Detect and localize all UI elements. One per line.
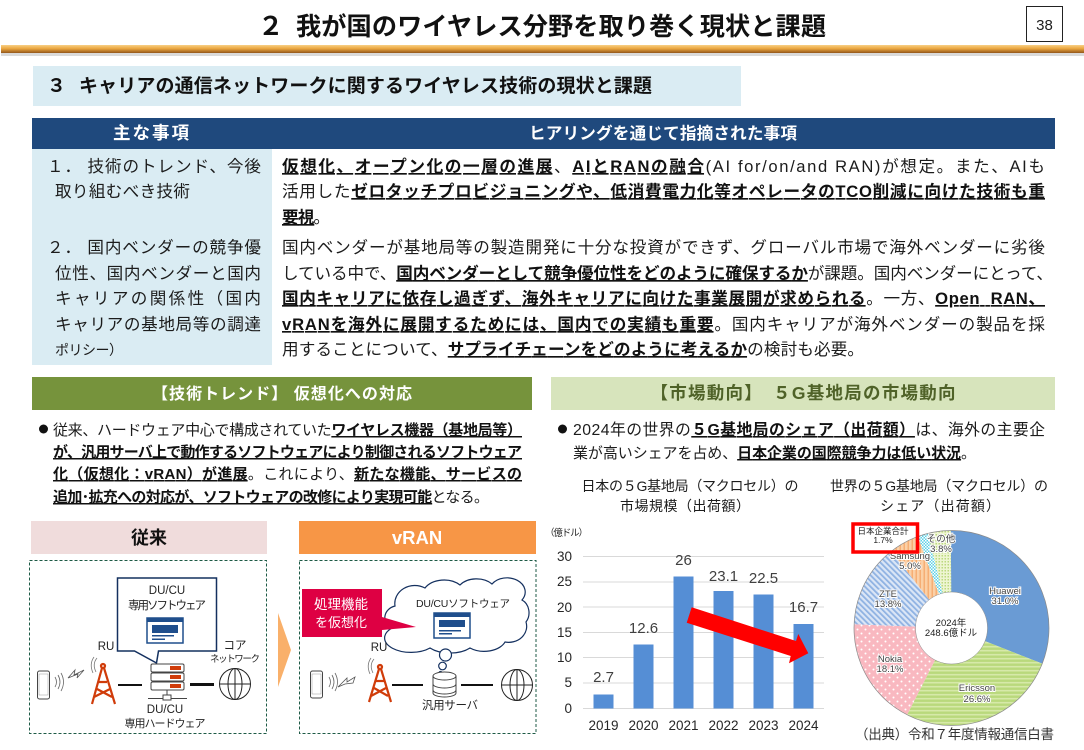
icon: smartphone — [38, 670, 84, 699]
cloud: DU/CU software — [385, 578, 529, 674]
left column: topics — [32, 149, 272, 365]
axis unit: （億ドル） — [545, 527, 588, 539]
market heading — [551, 377, 1055, 410]
conventional heading — [31, 521, 267, 554]
finding 2 text: している中で、国内ベンダーとして競争優位性をどのように確保するかが課題。国内ベンダーにとって、 — [282, 263, 1053, 283]
x axis labels: 2022 — [708, 718, 739, 733]
panel: market trend — [545, 377, 1055, 742]
trend bullet text: が、汎用サーバ上で動作するソフトウェアにより制御されるソフトウェア — [53, 443, 522, 461]
conventional heading: 従来 — [131, 528, 167, 548]
market bullet text: 2024年の世界の５G基地局のシェア（出荷額）は、海外の主要企 — [573, 421, 1045, 439]
left column: topics: 位性、国内ベンダーと国内 — [55, 264, 261, 283]
trend bullet text: 従来、ハードウェア中心で構成されていたワイヤレス機器（基地局等） — [53, 421, 522, 439]
icon: general-purpose server — [433, 672, 456, 697]
donut center total: 248.6億ドル — [925, 627, 978, 639]
label: dedicated hardware: DU/CU — [147, 704, 183, 716]
y axis labels: 15 — [557, 625, 572, 640]
left column: topics: １． 技術のトレンド、今後 — [47, 157, 261, 176]
donut slice labels: Samsung — [890, 551, 930, 562]
label: RU: RU — [98, 641, 114, 653]
bar values: 23.1 — [709, 568, 738, 585]
finding 1 text — [282, 157, 1045, 227]
cloud: DU/CU software: DU/CUソフトウェア — [416, 598, 510, 610]
finding 1 text: 活用したゼロタッチプロビジョニングや、低消費電力化等オペレータのTCO削減に向けた技術も重 — [282, 181, 1045, 201]
y axis labels: 25 — [557, 574, 572, 589]
callout: dedicated software — [118, 578, 216, 663]
donut slice labels: その他 — [927, 533, 956, 545]
bar values: 26 — [675, 552, 692, 569]
trend bullet text: 化（仮想化：vRAN）が進展。これにより、新たな機能、サービスの — [53, 465, 522, 483]
chart caption: Japan market size: 市場規模（出荷額） — [620, 498, 750, 514]
x axis labels: 2021 — [668, 718, 699, 733]
label: general-purpose server: 汎用サーバ — [422, 698, 478, 712]
donut center total — [925, 617, 978, 639]
x axis labels — [588, 718, 819, 733]
page number — [1026, 6, 1062, 42]
vRAN heading — [299, 521, 536, 554]
bars — [594, 576, 814, 708]
label: core network — [210, 640, 260, 665]
icon: globe — [502, 670, 532, 700]
label: core network: ネットワーク — [210, 654, 260, 665]
source note: （出典）令和７年度情報通信白書 — [855, 727, 1054, 742]
market bullet text — [558, 421, 1045, 462]
donut slice labels — [875, 533, 1021, 705]
left column: topics: キャリアの基地局等の調達 — [55, 315, 261, 334]
section heading — [33, 66, 741, 106]
market bullet text: 業が高いシェアを占め、日本企業の国際競争力は低い状況。 — [573, 444, 976, 462]
chart caption: world share — [830, 478, 1048, 514]
y axis labels — [557, 549, 572, 716]
left column: topics: キャリアの関係性（国内 — [55, 289, 261, 308]
link lines — [392, 684, 493, 686]
chart caption: world share: シェア（出荷額） — [880, 498, 1000, 514]
callout: virtualize processing: 処理機能 — [314, 597, 368, 612]
donut slice labels: Nokia — [878, 654, 903, 665]
label: core network: コア — [224, 640, 246, 652]
diagram: conventional architecture — [30, 560, 266, 734]
title rule — [1, 45, 1084, 56]
donut slice labels: Huawei — [989, 586, 1021, 597]
finding 2 text: 国内キャリアに依存し過ぎず、海外キャリアに向けた事業展開が求められる。一方、Open RAN、 — [282, 288, 1045, 308]
grid lines and axis — [583, 556, 824, 708]
chart caption: Japan market size: 日本の５G基地局（マクロセル）の — [582, 478, 798, 494]
chart caption: Japan market size — [582, 478, 798, 514]
y axis labels: 30 — [557, 549, 572, 564]
callout: virtualize processing — [302, 589, 416, 637]
table header: ヒアリングを通じて指摘された事項 — [529, 123, 797, 143]
bar values: 22.5 — [749, 570, 778, 587]
trend bullet text: 追加･拡充への対応が、ソフトウェアの改修により実現可能となる。 — [53, 488, 489, 506]
bar values: 2.7 — [593, 669, 614, 686]
donut slice labels: Ericsson — [959, 683, 995, 694]
arrow: declining trend — [687, 607, 808, 663]
page number: 38 — [1036, 17, 1053, 34]
icon: antenna tower — [368, 658, 391, 702]
y axis labels: 0 — [564, 701, 572, 716]
finding 2 text: 用することについて、サプライチェーンをどのように考えるかの検討も必要。 — [282, 340, 864, 359]
callout: Japanese companies total: 日本企業合計 — [857, 526, 909, 536]
x axis labels: 2023 — [748, 718, 779, 733]
y axis labels: 20 — [557, 600, 572, 615]
diagram: vRAN architecture — [300, 560, 536, 734]
finding 2 text — [282, 238, 1053, 359]
callout: dedicated software: 専用ソフトウェア — [128, 599, 206, 612]
bar values — [593, 552, 818, 686]
y axis labels: 5 — [564, 675, 572, 690]
donut slice labels: 5.0% — [899, 561, 921, 572]
title: ２ — [258, 13, 284, 41]
panel: technology trend — [30, 377, 536, 734]
table header — [32, 118, 1055, 149]
x axis labels: 2024 — [788, 718, 819, 733]
label: RU: RU — [371, 642, 387, 654]
finding 1 text: 仮想化、オープン化の一層の進展、AIとRANの融合(AI for/on/and RAN)が想定。また、AIも — [282, 157, 1045, 176]
section heading: ３ — [47, 76, 66, 97]
left column: topics: ２． 国内ベンダーの競争優 — [47, 238, 261, 257]
x axis labels: 2020 — [628, 718, 659, 733]
donut chart: world share — [853, 524, 1049, 726]
callout: virtualize processing: を仮想化 — [315, 615, 367, 630]
donut slice labels: 26.6% — [964, 694, 991, 705]
finding 2 text: vRANを海外に展開するためには、国内での実績も重要。国内キャリアが海外ベンダーの製品を採 — [282, 315, 1045, 334]
chart caption: world share: 世界の５G基地局（マクロセル）の — [830, 478, 1048, 494]
panel: findings table — [32, 118, 1055, 365]
market heading: 【市場動向】 ５G基地局の市場動向 — [650, 383, 956, 403]
table header: 主な事項 — [113, 123, 190, 143]
bar values: 16.7 — [789, 599, 818, 616]
bar values: 12.6 — [629, 620, 658, 637]
donut slice labels: 18.1% — [877, 664, 904, 675]
donut slice labels: 3.8% — [930, 544, 952, 555]
trend heading: 【技術トレンド】 仮想化への対応 — [152, 384, 412, 403]
label: dedicated hardware — [124, 704, 206, 730]
donut center total: 2024年 — [936, 617, 967, 629]
left column: topics: 取り組むべき技術 — [55, 182, 190, 201]
link lines — [118, 684, 214, 686]
finding 2 text: 国内ベンダーが基地局等の製造開発に十分な投資ができず、グローバル市場で海外ベンダーに劣後 — [282, 238, 1045, 257]
donut slice labels: ZTE — [879, 589, 897, 600]
x axis labels: 2019 — [588, 718, 619, 733]
bar chart: Japan market size — [545, 527, 824, 733]
callout: Japanese companies total — [853, 524, 918, 552]
title: 我が国のワイヤレス分野を取り巻く現状と課題 — [296, 12, 826, 41]
icon: globe — [220, 668, 250, 700]
label: dedicated hardware: 専用ハードウェア — [124, 717, 206, 730]
trend heading — [32, 377, 532, 410]
icon: antenna tower — [91, 657, 115, 704]
section heading: キャリアの通信ネットワークに関するワイヤレス技術の現状と課題 — [79, 74, 652, 97]
y axis labels: 10 — [557, 650, 572, 665]
arrow: conventional to vRAN — [278, 613, 291, 687]
left column: topics: ポリシー） — [55, 342, 123, 358]
donut slice labels: 31.0% — [992, 596, 1019, 607]
callout: Japanese companies total: 1.7% — [873, 535, 893, 545]
finding 1 text: 要視。 — [282, 208, 330, 227]
vRAN heading: vRAN — [392, 527, 442, 548]
trend bullet text — [39, 421, 522, 506]
icon: server — [148, 664, 187, 700]
donut slice labels: 13.8% — [875, 599, 902, 610]
callout: dedicated software: DU/CU — [149, 585, 185, 597]
icon: smartphone — [310, 671, 355, 698]
